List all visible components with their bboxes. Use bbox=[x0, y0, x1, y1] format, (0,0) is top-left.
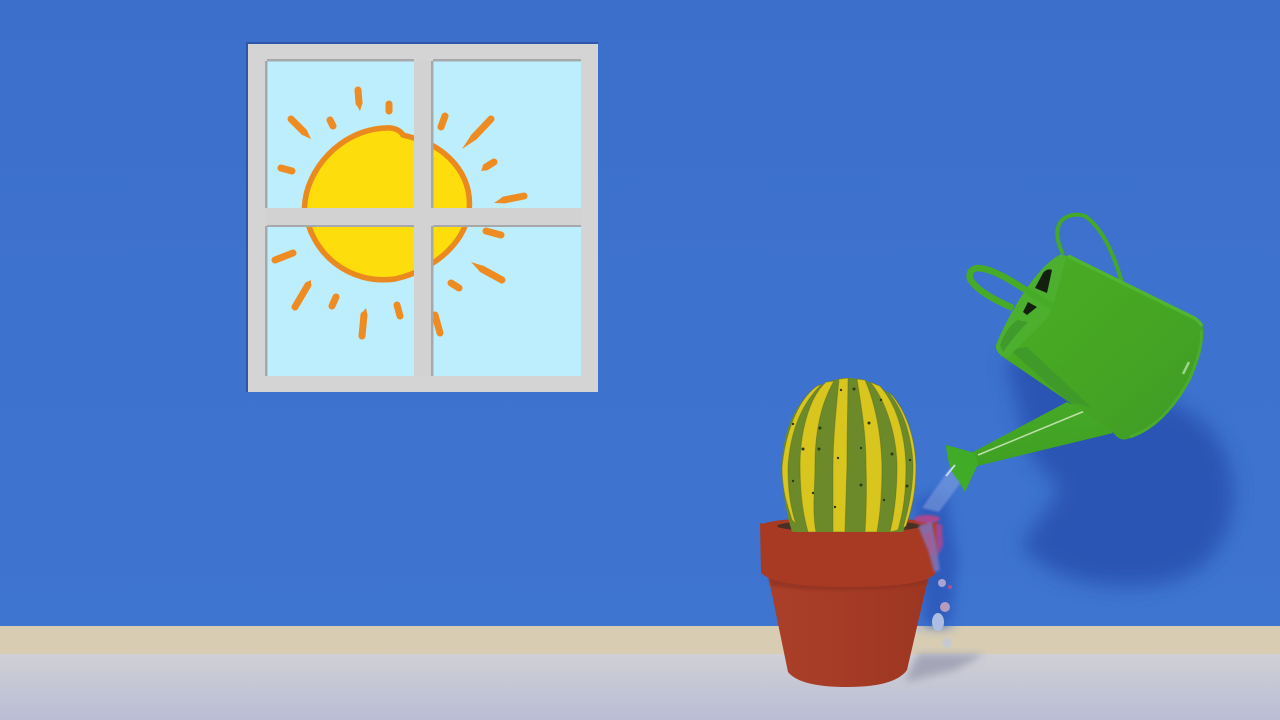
cactus body bbox=[782, 378, 916, 532]
pot shadow on floor bbox=[905, 654, 985, 682]
can spout bbox=[973, 402, 1113, 466]
can body bbox=[1000, 255, 1203, 440]
pot back rim and soil bbox=[760, 517, 938, 535]
terracotta pot bbox=[760, 520, 938, 687]
pot rim front bbox=[760, 520, 938, 587]
can top rim highlight bbox=[1068, 256, 1202, 326]
water highlight bbox=[946, 465, 955, 476]
can hole bbox=[1023, 269, 1052, 315]
pot body bbox=[768, 575, 929, 687]
can top handle bbox=[1057, 215, 1122, 283]
can reflection bbox=[1183, 362, 1189, 374]
spout nozzle bbox=[946, 445, 978, 492]
window frame bbox=[247, 43, 598, 392]
can end face bbox=[996, 254, 1066, 357]
window bbox=[246, 42, 598, 392]
falling water stream bbox=[922, 464, 964, 512]
can lower shading bbox=[1010, 347, 1092, 408]
floor bbox=[0, 654, 1280, 720]
baseboard bbox=[0, 626, 1280, 654]
face shading bbox=[1000, 320, 1028, 352]
window mullions bbox=[265, 61, 581, 376]
window outer edge bbox=[246, 42, 598, 392]
watering can bbox=[946, 215, 1203, 492]
window inner shadows bbox=[265, 59, 581, 376]
pot shadow on wall bbox=[915, 490, 958, 626]
watering can shadow on wall bbox=[1005, 345, 1234, 586]
can strap handle bbox=[970, 268, 1056, 309]
can bottom-end rim bbox=[1130, 330, 1202, 437]
rim undershadow bbox=[768, 577, 929, 591]
window panes bbox=[267, 61, 581, 376]
sun rays bbox=[275, 90, 524, 336]
cactus plant bbox=[782, 378, 916, 532]
spout highlight bbox=[978, 410, 1087, 455]
cactus stripes bbox=[782, 378, 916, 532]
cactus speckles bbox=[792, 388, 911, 508]
sun disc bbox=[304, 128, 470, 280]
water droplets bbox=[917, 579, 952, 648]
water overflow on rim bbox=[914, 515, 943, 572]
